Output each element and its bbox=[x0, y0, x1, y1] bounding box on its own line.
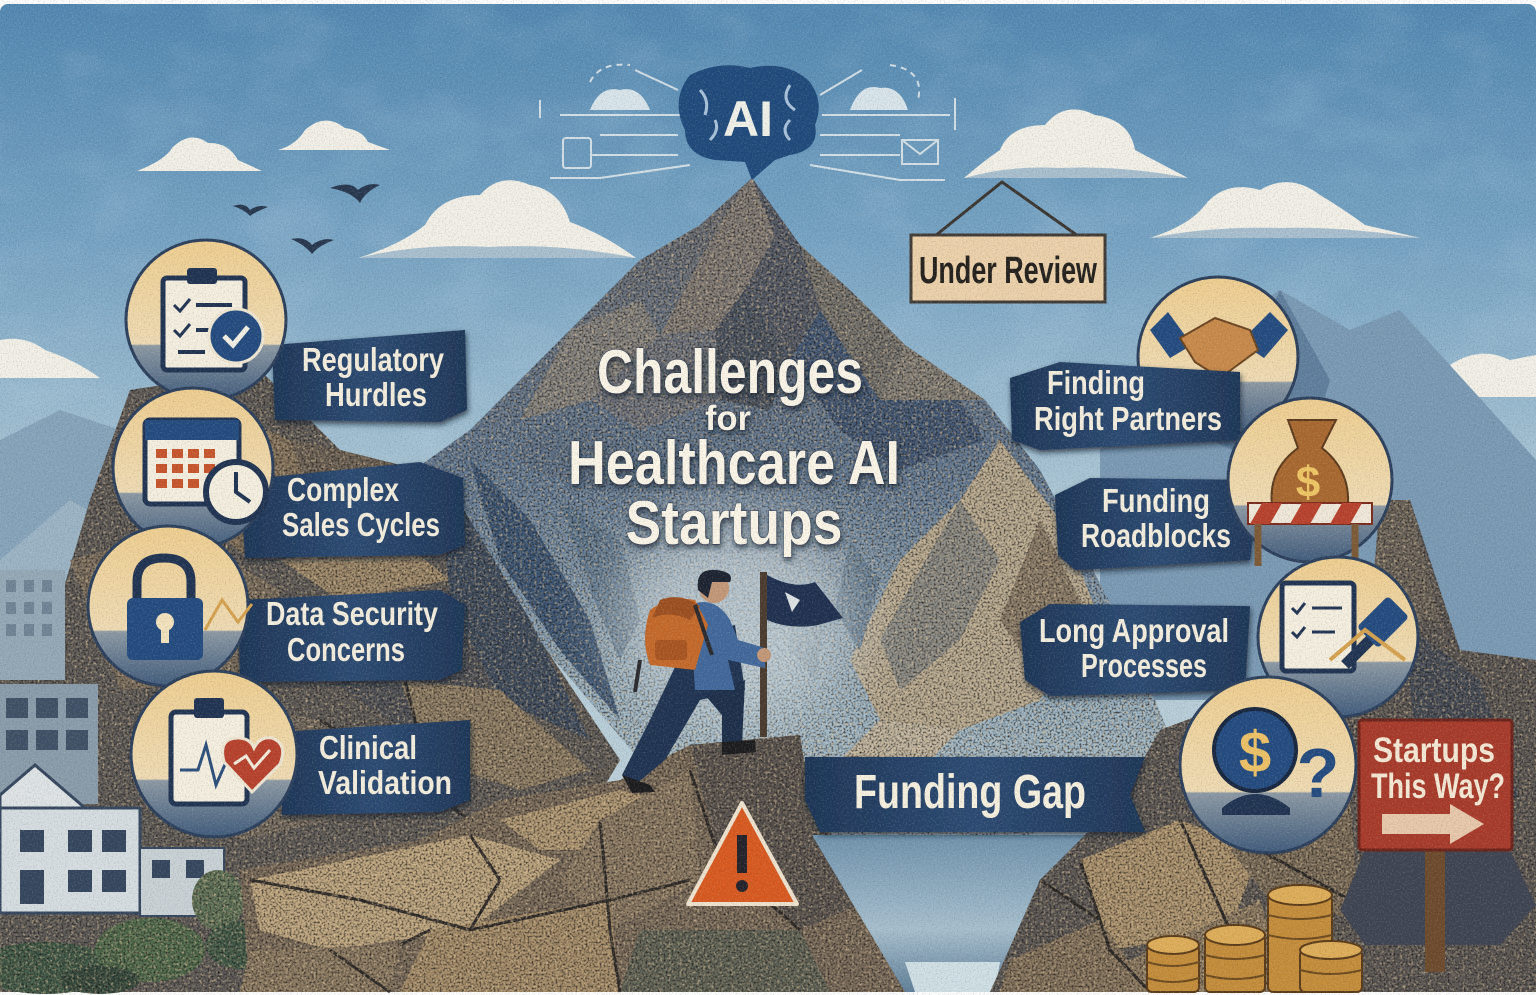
banner: finding right partners: Finding bbox=[1047, 364, 1145, 401]
left town bbox=[0, 570, 224, 916]
banner: finding right partners bbox=[1010, 362, 1240, 450]
AI brain cloud icon: AI bbox=[723, 91, 773, 147]
startups this way sign bbox=[1340, 720, 1536, 972]
title: Challenges bbox=[597, 338, 863, 407]
right panel: finding right partners bbox=[1010, 277, 1298, 450]
title bbox=[568, 338, 900, 558]
icon: clipboard with heart bbox=[131, 671, 297, 837]
left panel: complex sales cycles bbox=[113, 388, 465, 558]
banner: regulatory hurdles: Hurdles bbox=[325, 376, 427, 413]
banner: clinical validation: Clinical bbox=[319, 729, 417, 766]
right cliffs bbox=[990, 500, 1536, 992]
Under Review hanging sign: Under Review bbox=[919, 250, 1097, 292]
banner: data security concerns: Concerns bbox=[287, 631, 405, 668]
banner: clinical validation bbox=[280, 720, 470, 815]
banner: finding right partners: Right Partners bbox=[1034, 400, 1222, 437]
funding gap banner bbox=[805, 757, 1145, 832]
trees bbox=[0, 870, 274, 994]
icon: money bag and barrier bbox=[1228, 398, 1392, 566]
banner: regulatory hurdles: Regulatory bbox=[302, 341, 445, 378]
mist around hiker bbox=[615, 515, 855, 725]
title: for bbox=[705, 399, 751, 438]
banner: data security concerns bbox=[238, 590, 465, 682]
icon: dollar and question mark: $ bbox=[1239, 720, 1271, 785]
clouds bbox=[0, 87, 1536, 397]
left panel: clinical validation bbox=[131, 671, 470, 837]
banner: clinical validation: Validation bbox=[318, 764, 452, 801]
chasm and river bbox=[812, 835, 1130, 992]
title: Healthcare AI bbox=[568, 429, 900, 498]
banner: funding roadblocks: Funding bbox=[1102, 482, 1210, 519]
icon: dollar and question mark bbox=[1180, 677, 1356, 853]
coins bbox=[1147, 885, 1362, 992]
right panel: funding roadblocks bbox=[1055, 398, 1392, 570]
icon: dollar and question mark: ? bbox=[1297, 734, 1339, 812]
banner: long approval processes bbox=[1020, 604, 1250, 696]
hiker with flag bbox=[622, 570, 843, 793]
distant mountains bbox=[0, 290, 1536, 700]
foreground central rock ledge bbox=[240, 735, 910, 992]
warning triangle bbox=[688, 803, 797, 904]
startups this way sign: Startups bbox=[1373, 731, 1495, 770]
banner: long approval processes: Processes bbox=[1081, 647, 1207, 684]
icon: handshake bbox=[1138, 277, 1298, 437]
left panel: data security concerns bbox=[88, 526, 465, 686]
icon: clipboard and shield bbox=[126, 240, 286, 400]
AI brain cloud icon bbox=[540, 65, 955, 180]
funding gap banner: Funding Gap bbox=[854, 766, 1086, 819]
Under Review hanging sign bbox=[911, 182, 1105, 302]
banner: funding roadblocks: Roadblocks bbox=[1081, 517, 1231, 554]
icon: money bag and barrier: $ bbox=[1296, 458, 1320, 507]
icon: checklist and gavel bbox=[1258, 557, 1418, 717]
banner: complex sales cycles bbox=[240, 462, 465, 558]
icon: padlock bbox=[88, 526, 252, 686]
banner: complex sales cycles: Sales Cycles bbox=[282, 506, 440, 543]
banner: complex sales cycles: Complex bbox=[287, 471, 400, 508]
banner: long approval processes: Long Approval bbox=[1039, 612, 1229, 649]
left cliffs bbox=[0, 370, 620, 992]
birds bbox=[233, 184, 380, 254]
banner: regulatory hurdles bbox=[272, 330, 467, 422]
banner: data security concerns: Data Security bbox=[266, 595, 439, 632]
title: Startups bbox=[626, 489, 842, 558]
left panel: regulatory hurdles bbox=[126, 240, 467, 422]
banner: funding roadblocks bbox=[1055, 478, 1260, 570]
right panel: long approval processes bbox=[1020, 557, 1418, 717]
icon: calendar and clock bbox=[113, 388, 273, 548]
central mountain bbox=[400, 178, 1180, 900]
